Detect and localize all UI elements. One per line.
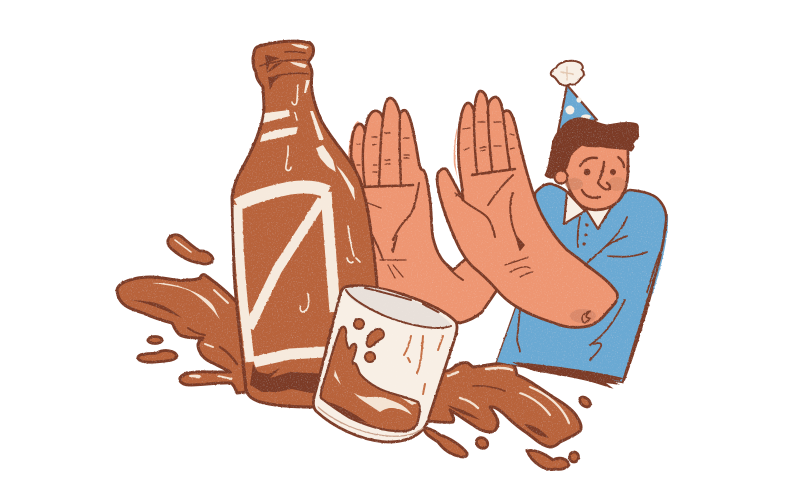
right raised hand and forearm	[437, 91, 617, 327]
man: shirt	[497, 184, 668, 389]
bottle label	[237, 187, 335, 362]
right beer splash	[425, 363, 581, 447]
man: face	[565, 136, 628, 210]
left splash droplets	[138, 235, 213, 362]
left raised hand and arm	[348, 98, 497, 323]
beer bottle	[232, 41, 382, 407]
party hat	[551, 61, 597, 132]
left beer splash	[117, 275, 246, 393]
liquid in glass	[321, 327, 420, 431]
man: hair	[545, 118, 639, 178]
glass of beer	[313, 286, 457, 442]
right splash droplets	[424, 395, 592, 470]
man: collar	[564, 192, 612, 229]
man: ear	[554, 170, 568, 184]
